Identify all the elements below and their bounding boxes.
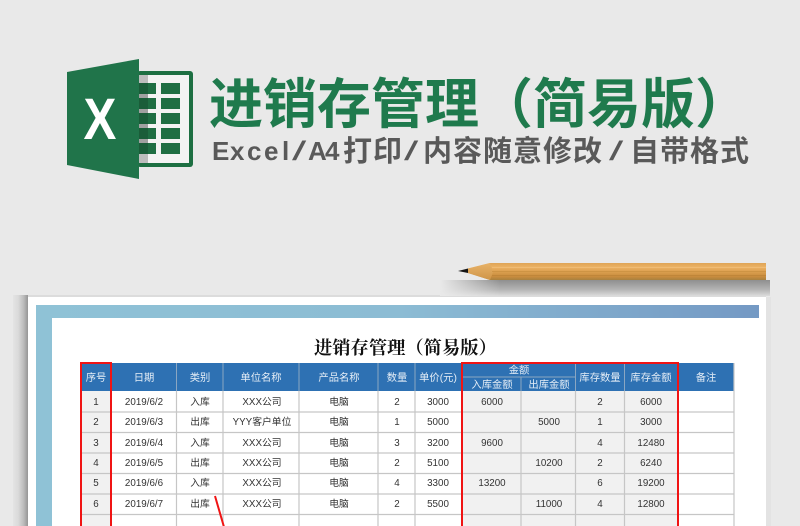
table rows: 入库 — [190, 476, 210, 489]
table rows: 19200 — [637, 478, 665, 489]
table rows: 6000 — [640, 397, 662, 408]
table header: 库存数量 — [579, 371, 621, 384]
table rows: 1 — [93, 397, 99, 408]
table header: 序号 — [86, 371, 106, 384]
amount and stock column shading — [462, 391, 678, 526]
table rows: 5 — [93, 478, 99, 489]
table header: 出库金额 — [528, 378, 570, 391]
data table — [80, 363, 734, 526]
table rows — [93, 395, 665, 510]
table rows: XXX公司 — [242, 458, 282, 469]
subtitle: 内容随意修改 — [423, 135, 603, 168]
table rows: XXX公司 — [242, 499, 282, 510]
red highlight: serial number column — [81, 363, 111, 526]
table rows: 2 — [597, 458, 603, 469]
table rows: 11000 — [536, 499, 563, 510]
table rows: 6 — [93, 499, 99, 510]
grid lines — [80, 363, 734, 526]
table header — [80, 363, 734, 391]
table rows: 3 — [394, 438, 400, 449]
table rows: 出库 — [190, 415, 210, 428]
table rows: 3000 — [427, 397, 449, 408]
table rows: 3300 — [427, 478, 449, 489]
table header: 金额 — [509, 364, 529, 376]
table header: 库存金额 — [630, 371, 672, 384]
table rows: XXX公司 — [242, 478, 282, 489]
subtitle: / — [609, 136, 624, 166]
table rows: 出库 — [190, 497, 210, 510]
table rows: 3 — [93, 438, 99, 449]
table rows: 2 — [597, 397, 603, 408]
paper sheet with shadow — [13, 280, 771, 526]
table rows: 9600 — [481, 438, 503, 449]
red arrow line — [215, 496, 224, 526]
table rows: 2 — [394, 499, 400, 510]
table rows: 2019/6/6 — [125, 478, 164, 489]
subtitle: Excel — [212, 136, 289, 166]
table header: 日期 — [134, 372, 154, 384]
table rows: 5500 — [427, 499, 449, 510]
subtitle — [212, 135, 750, 168]
table rows: XXX公司 — [242, 397, 282, 408]
red highlight: amount and stock columns — [462, 363, 678, 526]
table rows: 2 — [394, 458, 400, 469]
table rows: 4 — [597, 499, 603, 510]
table header: 数量 — [387, 371, 407, 384]
table rows: 3000 — [640, 417, 662, 428]
table rows: 电脑 — [329, 395, 349, 408]
table rows: 2 — [394, 397, 400, 408]
table rows: 6240 — [640, 458, 662, 469]
table rows: 入库 — [190, 395, 210, 408]
table rows: 2019/6/2 — [125, 397, 163, 408]
subtitle: 打印 — [343, 135, 403, 168]
table rows: 4 — [597, 438, 603, 449]
table rows: 10200 — [535, 458, 563, 469]
table rows: 13200 — [478, 478, 506, 489]
table rows: 电脑 — [329, 497, 349, 510]
table rows: 出库 — [190, 456, 210, 469]
subtitle: A4 — [308, 136, 340, 166]
table rows: XXX公司 — [242, 438, 282, 449]
sheet heading: 进销存管理（简易版） — [314, 337, 497, 358]
table rows: 4 — [93, 458, 99, 469]
table rows: 12480 — [637, 438, 665, 449]
table header: 备注 — [696, 371, 716, 384]
table rows: 2 — [93, 417, 99, 428]
table header: 产品名称 — [318, 371, 360, 384]
pencil — [458, 263, 766, 280]
table header: 类别 — [190, 371, 210, 384]
table rows: 2019/6/7 — [125, 499, 163, 510]
table rows: 1 — [394, 417, 400, 428]
table rows: 5000 — [538, 417, 560, 428]
table rows: 5000 — [427, 417, 449, 428]
table rows: 2019/6/3 — [125, 417, 164, 428]
table rows: 4 — [394, 478, 400, 489]
table rows: 电脑 — [329, 456, 349, 469]
table rows: 电脑 — [329, 476, 349, 489]
table rows: 6000 — [481, 397, 503, 408]
first column shading — [80, 391, 111, 526]
table header: 单价(元) — [419, 372, 457, 384]
table rows: 入库 — [190, 436, 210, 449]
table header: 入库金额 — [471, 378, 513, 391]
table rows: 电脑 — [329, 436, 349, 449]
table rows: 1 — [597, 417, 603, 428]
table header: 单位名称 — [240, 371, 282, 384]
subtitle: / — [292, 136, 307, 166]
table rows: 3200 — [427, 438, 449, 449]
table rows: 12800 — [637, 499, 665, 510]
subtitle: / — [404, 136, 419, 166]
icon: Excel logo: X — [84, 87, 117, 152]
table rows: 2019/6/5 — [125, 458, 164, 469]
table rows: 6 — [597, 478, 603, 489]
table rows: 2019/6/4 — [125, 438, 164, 449]
table rows: 电脑 — [329, 415, 349, 428]
title: 进销存管理（简易版） — [209, 75, 749, 135]
table rows: 5100 — [427, 458, 449, 469]
icon: Excel logo — [67, 59, 193, 179]
subtitle: 自带格式 — [630, 135, 750, 168]
table rows: YYY客户单位 — [233, 415, 292, 428]
